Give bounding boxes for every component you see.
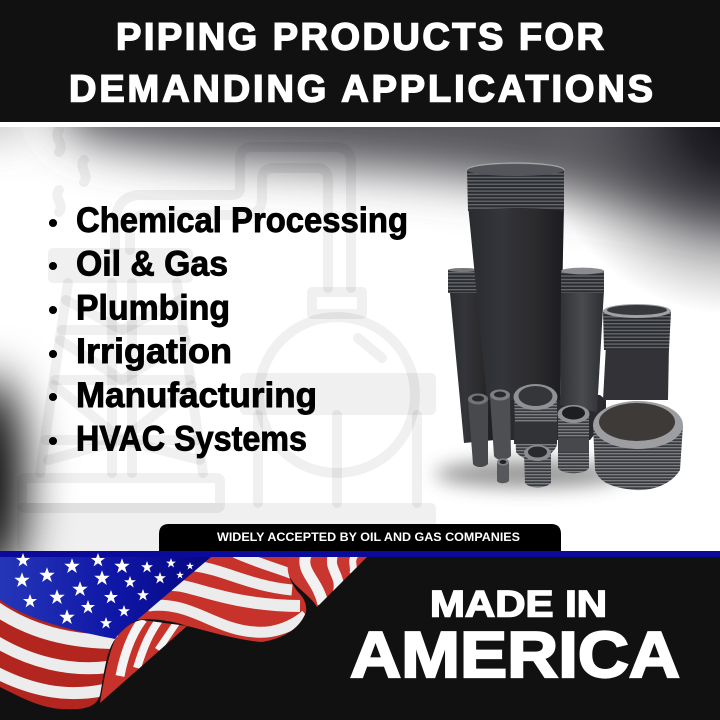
flag: lower left stripes (0, 600, 122, 710)
pipe: tall left (448, 268, 495, 443)
america: AMERICA (350, 618, 680, 691)
floor shadow (435, 460, 625, 488)
bullet and item: Irrigation: Irrigation (76, 332, 232, 371)
top banner (0, 0, 720, 122)
flag: back side fold stripes (100, 620, 187, 703)
flag: far fold stripes (288, 557, 367, 607)
middle panel: vignette background (0, 127, 720, 551)
pipe: slim nipple left (468, 394, 488, 467)
pipe: short wide front (593, 401, 683, 490)
bullet and item: Chemical Processing: Chemical Processing (76, 201, 408, 240)
blue stripe (0, 551, 720, 557)
dark backing between pipes (470, 395, 606, 440)
pipe: slim nipple centre (490, 390, 511, 460)
caption text: WIDELY ACCEPTED BY OIL AND GAS COMPANIES (217, 530, 520, 544)
pipe: short nipple front (524, 445, 551, 488)
bullet and item: Oil & Gas: Oil & Gas (76, 244, 228, 284)
title: PIPING PRODUCTS FOR (116, 16, 604, 58)
flag: blue canton (0, 557, 211, 639)
watermark: derrick top (48, 248, 193, 283)
made in: MADE IN (430, 584, 607, 624)
watermark: lower band (17, 503, 436, 551)
watermark: tank band (240, 373, 436, 415)
icon: waving American flag (0, 553, 370, 715)
bullet and item: HVAC Systems: HVAC Systems (76, 420, 307, 458)
flag: stars (14, 553, 194, 628)
bottom banner (0, 557, 720, 720)
watermark: refinery pipes and derrick (22, 130, 417, 508)
bullet and item: Plumbing: Plumbing (76, 288, 230, 328)
white divider under banner (0, 122, 720, 127)
title: DEMANDING APPLICATIONS (69, 68, 653, 110)
flag: main stripes (114, 557, 306, 642)
made in america text (350, 584, 680, 691)
product photo: threaded steel pipe nipples (435, 163, 683, 490)
pipe: large centre (467, 163, 564, 400)
pipe: tall right (560, 268, 604, 412)
title (69, 16, 653, 110)
caption pill (159, 524, 561, 552)
pipe: wide right (603, 304, 671, 400)
application list (49, 201, 408, 458)
bullet and item: Manufacturing: Manufacturing (76, 376, 317, 415)
pipe: medium nipple (514, 384, 558, 460)
pipe: tiny nipple (497, 458, 509, 483)
pipe: small nipple right (558, 405, 590, 473)
